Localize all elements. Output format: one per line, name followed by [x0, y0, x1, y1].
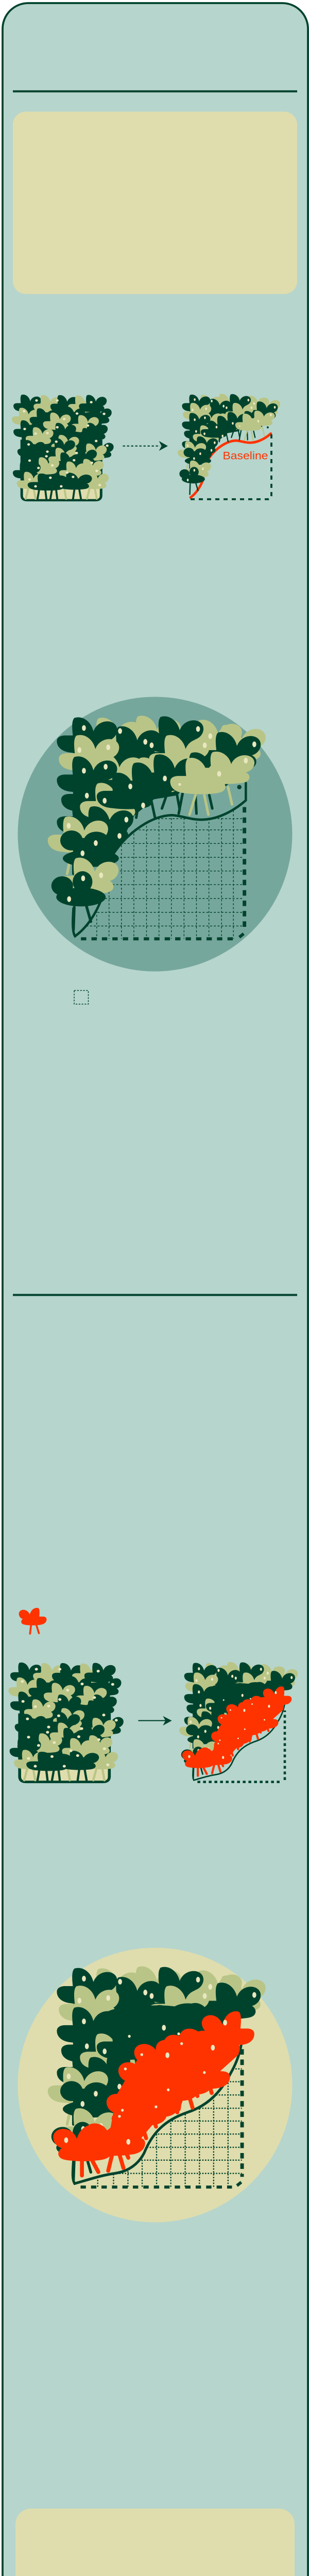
- divider: section two: [13, 1294, 297, 1296]
- icon: red clover: [19, 1608, 46, 1634]
- illustration: full plant tray, section one: [12, 395, 114, 500]
- legend: dashed cell: [74, 990, 89, 1004]
- illustration: trimmed plant with baseline: [178, 394, 280, 499]
- panel: closing: [15, 2509, 295, 2576]
- label: baseline: Baseline: [222, 450, 268, 462]
- illustration: circle with trimmed plant over grid: [18, 697, 293, 972]
- arrow: solid: [138, 1716, 172, 1725]
- arrow: dashed: [123, 441, 168, 451]
- grid: dotted measuring cells: [97, 2068, 242, 2187]
- grid: dashed measuring cells: [87, 811, 242, 939]
- divider: section one: [13, 90, 297, 92]
- illustration: trimmed plant with red growth: [179, 1662, 298, 1782]
- illustration: full plant tray, section two: [8, 1663, 124, 1782]
- panel: intro: [13, 112, 297, 294]
- illustration: circle with red growth over grid: [18, 1947, 293, 2223]
